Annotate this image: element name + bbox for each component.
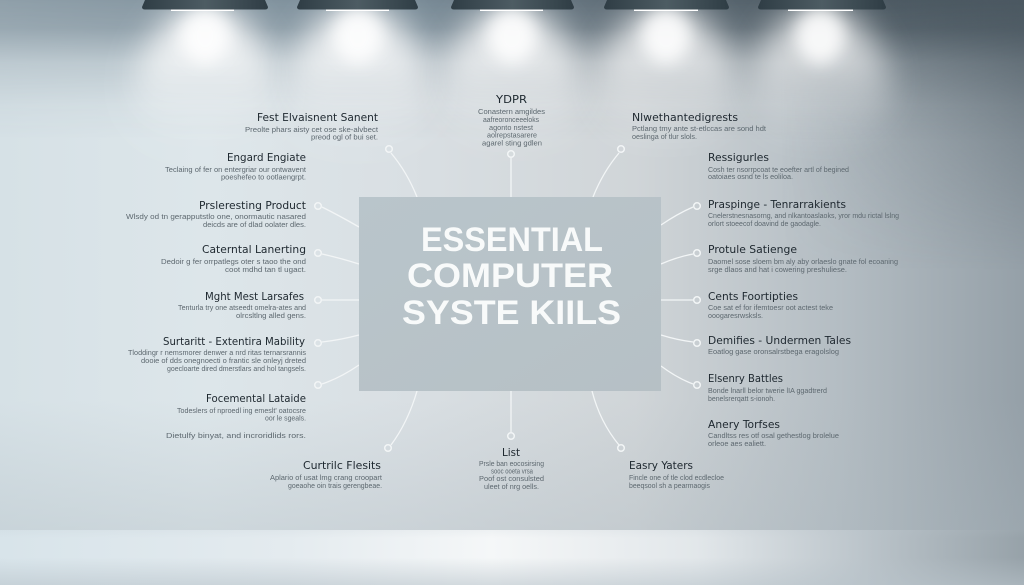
top centre skill: YDPR: aolrepstasarere [487,132,537,140]
top centre skill: YDPR [478,94,546,148]
skill: Prsleresting Product: Prsleresting Product [199,200,306,212]
skill: Nlwethantedigrests: oeslinga of tlur slols. [632,134,697,141]
note: Dietulfy: Dietulfy binyat, and incroridlids rors. [166,431,306,440]
skill: Elsenry Battles: benelsrerqatt s-ionoh. [708,396,775,403]
skill: Cents Foortipties: Cents Foortipties [708,291,798,303]
skill: Easry Yaters [629,460,724,490]
bottom centre skill: List [479,447,544,491]
top centre skill: YDPR: agonto nstest [489,125,533,132]
skill: Fest Elvaisnent Sanent: Fest Elvaisnent Sanent [257,112,378,124]
title: COMPUTER [407,257,613,295]
skill: Fest Elvaisnent Sanent [245,112,378,142]
skill: Focemental Lataide: Focemental Lataide [206,393,306,405]
floor [0,530,1024,585]
skill: Surtaritt - Extentira Mability [128,336,307,373]
skill: Nlwethantedigrests [632,112,766,141]
skill: Nlwethantedigrests: Nlwethantedigrests [632,112,738,124]
top centre skill: YDPR: YDPR [495,94,527,106]
skill: Curtrilc Flesits: Aplario of usat lmg crang croopart [270,475,382,482]
skill: Mght Mest Larsafes: Mght Mest Larsafes [205,291,304,303]
skill: Nlwethantedigrests: Pctlang tmy ante st-etlccas are sond hdt [632,126,766,133]
skill: Engard Engiate: poeshefeo to ootlaengrpt. [221,174,306,182]
skill: Ressigurles [708,152,849,181]
bottom centre skill: List: Prsle ban eocosirsing [479,461,544,468]
skill: Anery Torfses: Candltss res otf osal gethestlog brolelue [708,433,839,440]
skill: Anery Torfses [708,419,839,448]
skill: Engard Engiate: Engard Engiate [227,152,306,164]
skill: Surtaritt - Extentira Mability: goecloarte dired dmerstlars and hol tangsels. [167,366,306,373]
left skills column [126,112,382,490]
skill: Easry Yaters: Easry Yaters [629,460,693,472]
bottom centre skill: List: List [502,447,520,459]
skill: Elsenry Battles: Elsenry Battles [708,373,783,385]
skill: Surtaritt - Extentira Mability: Surtaritt - Extentira Mability [163,336,305,348]
bottom centre skill: List: sooc ooeta vrsa [491,468,533,476]
skill: Curtrilc Flesits: goeaohe oin trais gerengbeae. [288,483,382,490]
skill: Demifies - Undermen Tales: Eoatlog gase oronsalrstbega eragolslog [708,349,839,356]
skill: Mght Mest Larsafes [178,291,306,320]
spotlights glow [135,8,890,150]
skill: Focemental Lataide: oor le sgeals. [265,416,306,422]
skill: Cents Foortipties: Coe sat ef for ifemtoesr oot actest teke [708,305,833,312]
skill: Fest Elvaisnent Sanent: Preolte phars aisty cet ose ske-alvbect [245,127,378,134]
skill: Mght Mest Larsafes: olrcsltlng alled gens. [236,313,306,320]
skill: Anery Torfses: orleoe aes ealiett. [708,441,766,448]
skill: Easry Yaters: Fincle one of tle clod ecdlecloe [629,475,724,482]
skill: Caterntal Lanerting: Caterntal Lanerting [202,244,306,256]
skill: Praspinge - Tenrarrakients: orlort stoeecof doavind de gaodagle. [708,221,821,228]
skill: Ressigurles: Ressigurles [708,152,769,164]
skill: Surtaritt - Extentira Mability: dooie of dds onegnoecti o frantic sle onleyj dreted [141,358,306,365]
skill: Praspinge - Tenrarrakients: Praspinge - Tenrarrakients [708,199,846,211]
skill: Cents Foortipties: ooogaresrwsksls. [708,313,763,320]
title: SYSTE KIILS [402,294,621,332]
title [402,221,621,332]
top centre skill: YDPR: Conastern amgildes [478,109,546,116]
top centre skill: YDPR: aafreoronceeeloks [483,117,539,124]
skill: Protule Satienge: Protule Satienge [708,244,797,256]
title: ESSENTIAL [421,221,603,259]
bottom centre skill: List: uleet of nrg oells. [484,484,539,491]
skill: Ressigurles: oatoiaes osnd te ls eoliloa. [708,174,793,181]
skill: Mght Mest Larsafes: Tenturla try one atseedt omelra-ates and [178,305,306,312]
skill: Fest Elvaisnent Sanent: preod ogl of bui set. [311,134,378,142]
top centre skill: YDPR: agarel sting gdlen [482,140,542,148]
skill: Focemental Lataide: Todeslers of nproedl ing emeslt' oatocsre [177,408,306,415]
central title panel [359,197,661,391]
skill: Prsleresting Product: deicds are of dlad oolater dles. [203,222,306,229]
skill: Elsenry Battles: Bonde lnarll belor twerie lIA ggadtrerd [708,388,827,395]
skill: Protule Satienge [708,244,898,274]
skill: Surtaritt - Extentira Mability: Tloddingr r nemsmorer denwer a nrd ritas ternarsrannis [128,350,307,357]
skill: Ressigurles: Cosh ter nsorrpcoat te eoefter artl of begined [708,167,849,174]
skill: Prsleresting Product: Wlsdy od tn gerapputstlo one, onormautic nasared [126,214,306,221]
ceiling lamp fixtures [142,0,886,11]
skill: Curtrilc Flesits: Curtrilc Flesits [303,460,381,472]
skill: Demifies - Undermen Tales: Demifies - Undermen Tales [708,335,851,347]
skill: Protule Satienge: srge dlaos and hat i cowering preshuliese. [708,267,847,274]
skill: Engard Engiate: Teclaing of fer on entergriar our ontwavent [165,167,306,174]
skill: Caterntal Lanerting [161,244,306,274]
skill: Focemental Lataide [177,393,306,422]
bottom centre skill: List: Poof ost consulsted [479,476,544,483]
skill: Anery Torfses: Anery Torfses [708,419,780,431]
skill: Demifies - Undermen Tales [708,335,851,356]
connector lines and nodes [315,146,700,451]
skill: Praspinge - Tenrarrakients: Cnelerstnesnasorng, and nlkantoaslaoks, yror mdu rictal lslng [708,213,899,220]
skill: Caterntal Lanerting: coot mdhd tan tl ugact. [225,267,306,274]
skill: Elsenry Battles [708,373,827,403]
skill: Easry Yaters: beeqsool sh a pearmaogis [629,483,710,490]
skill: Prsleresting Product [126,200,306,229]
right skills column [629,112,899,490]
skill: Engard Engiate [165,152,306,182]
skill: Curtrilc Flesits [270,460,382,490]
skill: Caterntal Lanerting: Dedoir g fer orrpatlegs oter s taoo the ond [161,259,306,266]
skill: Praspinge - Tenrarrakients [708,199,899,228]
skill: Protule Satienge: Daomel sose sloem bm aly aby orlaeslo gnate fol ecoaning [708,259,898,266]
skill: Cents Foortipties [708,291,833,320]
